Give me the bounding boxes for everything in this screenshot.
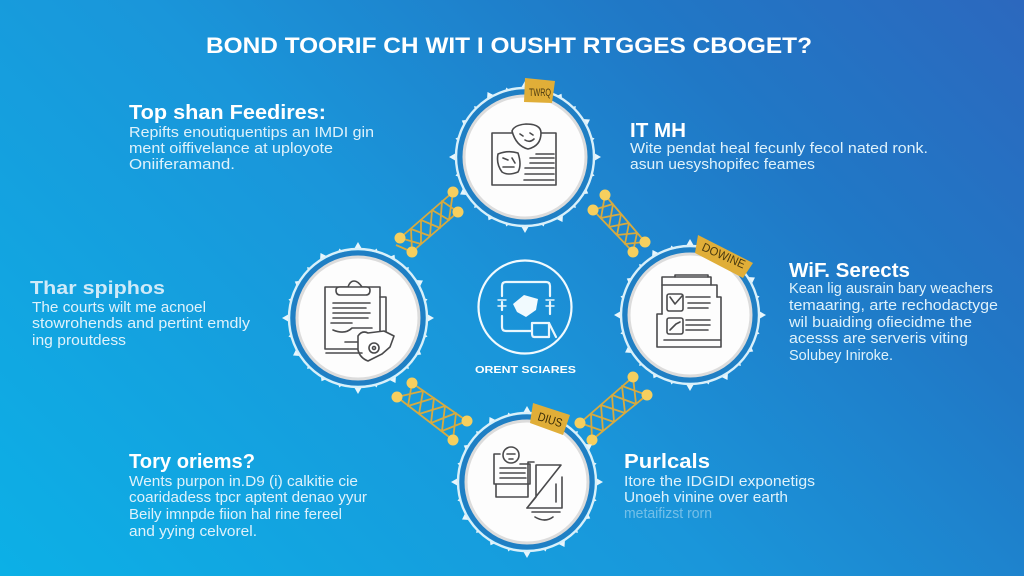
text block: right: WiF. Serects — [789, 260, 910, 282]
center label: ORENT SCIARES — [475, 364, 576, 376]
text block: bottom left: Tory oriems? — [129, 451, 255, 473]
text block: right: wil buaiding ofiecidme the — [788, 315, 972, 331]
text block: bottom left: and yying celvorel. — [129, 524, 257, 540]
title: BOND TOORIF CH WIT I OUSHT RTGGES CBOGET? — [206, 33, 812, 58]
tag: bottom — [530, 403, 570, 435]
text block: bottom right — [624, 451, 815, 522]
tag: right: DOWINE — [700, 240, 747, 271]
text block: bottom right: Purlcals — [624, 451, 710, 473]
panel: top node — [449, 78, 601, 233]
text block: right: temaaring, arte rechodactyge — [789, 298, 998, 314]
text block: top left: Top shan Feedires: — [129, 102, 326, 124]
text block: left: Thar spiphos — [30, 278, 165, 298]
tag: top: TWRQ — [529, 87, 551, 99]
text block: left: stowrohends and pertint emdly — [32, 316, 251, 332]
text block: bottom right: Itore the IDGIDI exponetigs — [624, 474, 815, 490]
text block: right: Kean lig ausrain bary weachers — [789, 281, 993, 297]
text block: bottom left: Wents purpon in.D9 (i) calkitie cie — [129, 474, 358, 490]
icon: clipboard with key — [325, 281, 394, 361]
text block: bottom left — [129, 451, 367, 540]
panel: bottom node — [451, 403, 603, 558]
panel: center badge — [475, 260, 576, 376]
tag: bottom: DIUS — [536, 409, 564, 430]
text block: right: acesss are serveris viting — [789, 331, 968, 347]
icon: checklist folder — [657, 275, 721, 347]
icon: handshake in circle — [478, 260, 572, 354]
text block: top left: Oniiferamand. — [129, 157, 235, 173]
text block: bottom right: metaifizst rorn — [624, 506, 712, 522]
text block: bottom right: Unoeh vinine over earth — [624, 490, 788, 506]
panel: right node — [614, 235, 766, 391]
text block: top left: ment oiffivelance at uployote — [129, 141, 333, 157]
text block: right — [788, 260, 998, 364]
connector: bottom-left — [392, 378, 472, 446]
text block: left: ing proutdess — [32, 333, 126, 349]
icon: document and blueprint — [494, 447, 562, 520]
text block: top left: Repifts enoutiquentips an IMDI gin — [129, 125, 374, 141]
connector: top-left — [394, 186, 464, 258]
text block: bottom left: Beily imnpde fiion hal rine fereel — [129, 507, 342, 523]
text block: left — [30, 278, 251, 349]
icon: id card with faces — [492, 124, 556, 185]
text block: bottom left: coaridadess tpcr aptent denao yyur — [129, 490, 367, 506]
text block: top right: Wite pendat heal fecunly fecol nated ronk. — [630, 141, 928, 157]
tag: right — [695, 235, 753, 278]
text block: right: Solubey Iniroke. — [789, 348, 893, 364]
panel: left node — [282, 242, 434, 394]
connector: bottom-right — [574, 372, 652, 446]
text block: top left — [129, 102, 374, 173]
text block: top right: asun uesyshopifec feames — [630, 157, 815, 173]
text block: left: The courts wilt me acnoel — [32, 300, 206, 316]
text block: top right — [630, 120, 928, 173]
text block: top right: IT MH — [630, 120, 686, 142]
connector: top-right — [588, 190, 650, 258]
tag: top — [524, 78, 555, 103]
